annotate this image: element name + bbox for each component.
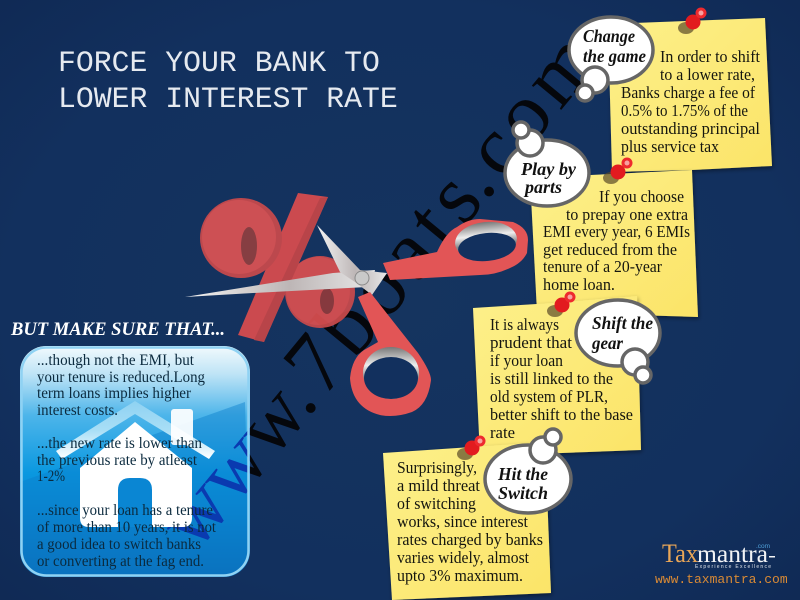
pin: note 3 (547, 292, 576, 317)
scissor handle: bottom (350, 292, 431, 416)
pin: note 4 (457, 436, 486, 460)
watermark: www.7boats.com: 7boats (264, 153, 500, 411)
note 2: play by parts: to prepay one extra (566, 205, 689, 224)
pin: note 2 (603, 158, 632, 184)
callout: change the game: the game (583, 46, 646, 66)
note 4: hit the switch: rates charged by banks (397, 530, 543, 549)
gloss band (20, 402, 250, 578)
note 1: change the game: to a lower rate, (660, 65, 755, 84)
icon: house (56, 401, 215, 527)
logo: taxmantra: Experience Excellence (695, 564, 771, 570)
note 1: change the game: 0.5% to 1.75% of the (621, 101, 748, 120)
callout: play by parts: parts (523, 177, 562, 197)
callout: hit the switch (485, 429, 571, 513)
note 2: play by parts: If you choose (599, 187, 684, 206)
text: conditions: your tenure is reduced.Long (37, 369, 205, 386)
note 1: change the game: plus service tax (621, 137, 720, 156)
callout: shift the gear: gear (591, 333, 623, 353)
text: conditions: ...since your loan has a tenure (37, 502, 213, 519)
note 4: hit the switch: varies widely, almost (397, 548, 529, 567)
logo: taxmantra: Tax (662, 539, 698, 568)
note 3: shift the gear: better shift to the base (490, 405, 633, 424)
note 2: play by parts: home loan. (543, 275, 615, 294)
note 3: shift the gear: prudent that (490, 333, 572, 352)
watermark: www.7boats.com: www. (139, 355, 334, 564)
text: conditions: ...though not the EMI, but (37, 352, 195, 369)
logo: taxmantra (655, 539, 788, 587)
note 1: change the game (608, 18, 772, 172)
text: conditions: term loans implies higher (37, 385, 192, 402)
text: conditions: ...the new rate is lower than (37, 435, 202, 452)
note 3: shift the gear (473, 296, 641, 456)
scissor handle: right (383, 219, 528, 280)
title: LOWER INTEREST RATE (58, 82, 398, 116)
note 2: play by parts: get reduced from the (543, 240, 677, 259)
subheading: but make sure that: BUT MAKE SURE THAT... (10, 319, 225, 340)
callout: hit the switch: Hit the (497, 464, 548, 484)
text: conditions: the previous rate by atleast (37, 452, 198, 469)
note 4: hit the switch: works, since interest (397, 512, 528, 531)
illustration: percent sign cut by scissors (185, 193, 528, 416)
note 1: change the game: In order to shift (660, 47, 760, 66)
callout: change the game (569, 17, 653, 101)
note 3: shift the gear: is still linked to the (490, 369, 613, 388)
note 2: play by parts: EMI every year, 6 EMIs (543, 222, 690, 241)
text: conditions: of more than 10 years, it is not (37, 519, 217, 536)
note 1: change the game: outstanding principal (621, 119, 760, 138)
note 2: play by parts (530, 170, 698, 317)
note 3: shift the gear: rate (490, 423, 515, 442)
watermark: www.7boats.com: .com (428, 14, 615, 213)
callout: play by parts (505, 122, 589, 206)
callout: change the game: Change (583, 26, 635, 46)
note 4: hit the switch: a mild threat (397, 476, 480, 495)
pivot screw (355, 271, 369, 285)
callout: play by parts: Play by (520, 159, 576, 179)
text: conditions: or converting at the fag end. (37, 553, 204, 570)
logo: taxmantra: mantra (697, 541, 768, 568)
panel: blue house box (20, 346, 250, 577)
callout: hit the switch: Switch (498, 483, 548, 503)
note 3: shift the gear: if your loan (490, 351, 563, 370)
watermark over box: www (139, 367, 324, 564)
note 4: hit the switch: Surprisingly, (397, 458, 477, 477)
logo: taxmantra: www.taxmantra.com (655, 572, 788, 587)
note 4: hit the switch: of switching (397, 494, 476, 513)
title (58, 46, 398, 116)
scissor blades (185, 270, 375, 297)
text: conditions (37, 352, 217, 570)
callout: shift the gear (576, 300, 660, 383)
note 1: change the game: Banks charge a fee of (621, 83, 755, 102)
note 4: hit the switch (383, 442, 551, 600)
text: conditions: 1-2% (37, 468, 65, 485)
text: conditions: interest costs. (37, 402, 118, 419)
watermark: www.7boats.com (137, 12, 616, 565)
callout: shift the gear: Shift the (592, 313, 653, 333)
note 3: shift the gear: It is always (490, 315, 559, 334)
logo: taxmantra: .com (756, 543, 770, 550)
note 2: play by parts: tenure of a 20-year (543, 257, 662, 276)
note 4: hit the switch: upto 3% maximum. (397, 566, 523, 585)
pin: note 1 (678, 8, 706, 34)
title: FORCE YOUR BANK TO (58, 46, 380, 80)
note 3: shift the gear: old system of PLR, (490, 387, 608, 406)
percent sign (200, 193, 355, 342)
text: conditions: a good idea to switch banks (37, 536, 201, 553)
